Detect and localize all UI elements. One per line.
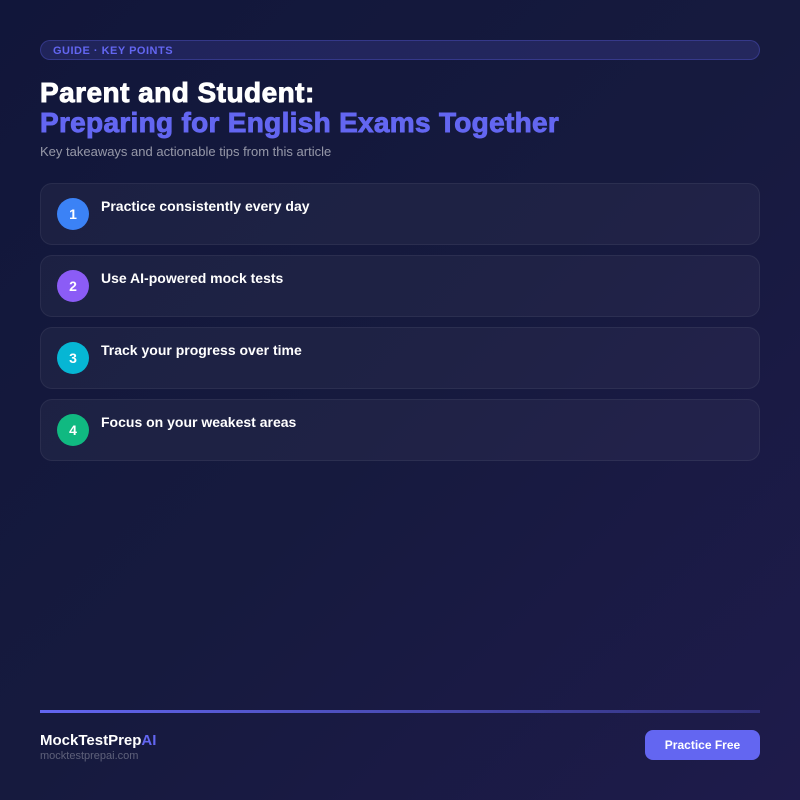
button: practice free <box>645 730 760 760</box>
brand name: MockTestPrepAI <box>40 732 156 749</box>
badge: guide key points <box>40 40 760 60</box>
button: practice free: Practice Free <box>665 738 740 752</box>
number badge 1: 1 <box>69 206 77 222</box>
tip 2 text: Use AI-powered mock tests <box>101 270 283 286</box>
brand block <box>40 732 156 762</box>
card: tip 4 <box>40 399 760 461</box>
footer accent line <box>40 710 760 713</box>
title: Parent and Student: <box>40 77 315 108</box>
card: tip 3 <box>40 327 760 389</box>
number badge 1 <box>57 198 89 230</box>
number badge 3 <box>57 342 89 374</box>
number badge 4: 4 <box>69 422 77 438</box>
tip 4 text: Focus on your weakest areas <box>101 414 296 430</box>
brand url: mocktestprepai.com <box>40 750 138 762</box>
tip 3 text: Track your progress over time <box>101 342 302 358</box>
subtitle: Key takeaways and actionable tips from this article <box>40 144 331 159</box>
title: Preparing for English Exams Together <box>40 107 559 138</box>
card: tip 1 <box>40 183 760 245</box>
number badge 4 <box>57 414 89 446</box>
card: tip 2 <box>40 255 760 317</box>
number badge 2 <box>57 270 89 302</box>
number badge 3: 3 <box>69 350 77 366</box>
tip 1 text: Practice consistently every day <box>101 198 310 214</box>
badge: guide key points: GUIDE · KEY POINTS <box>53 45 173 57</box>
number badge 2: 2 <box>69 278 77 294</box>
title <box>40 77 559 138</box>
